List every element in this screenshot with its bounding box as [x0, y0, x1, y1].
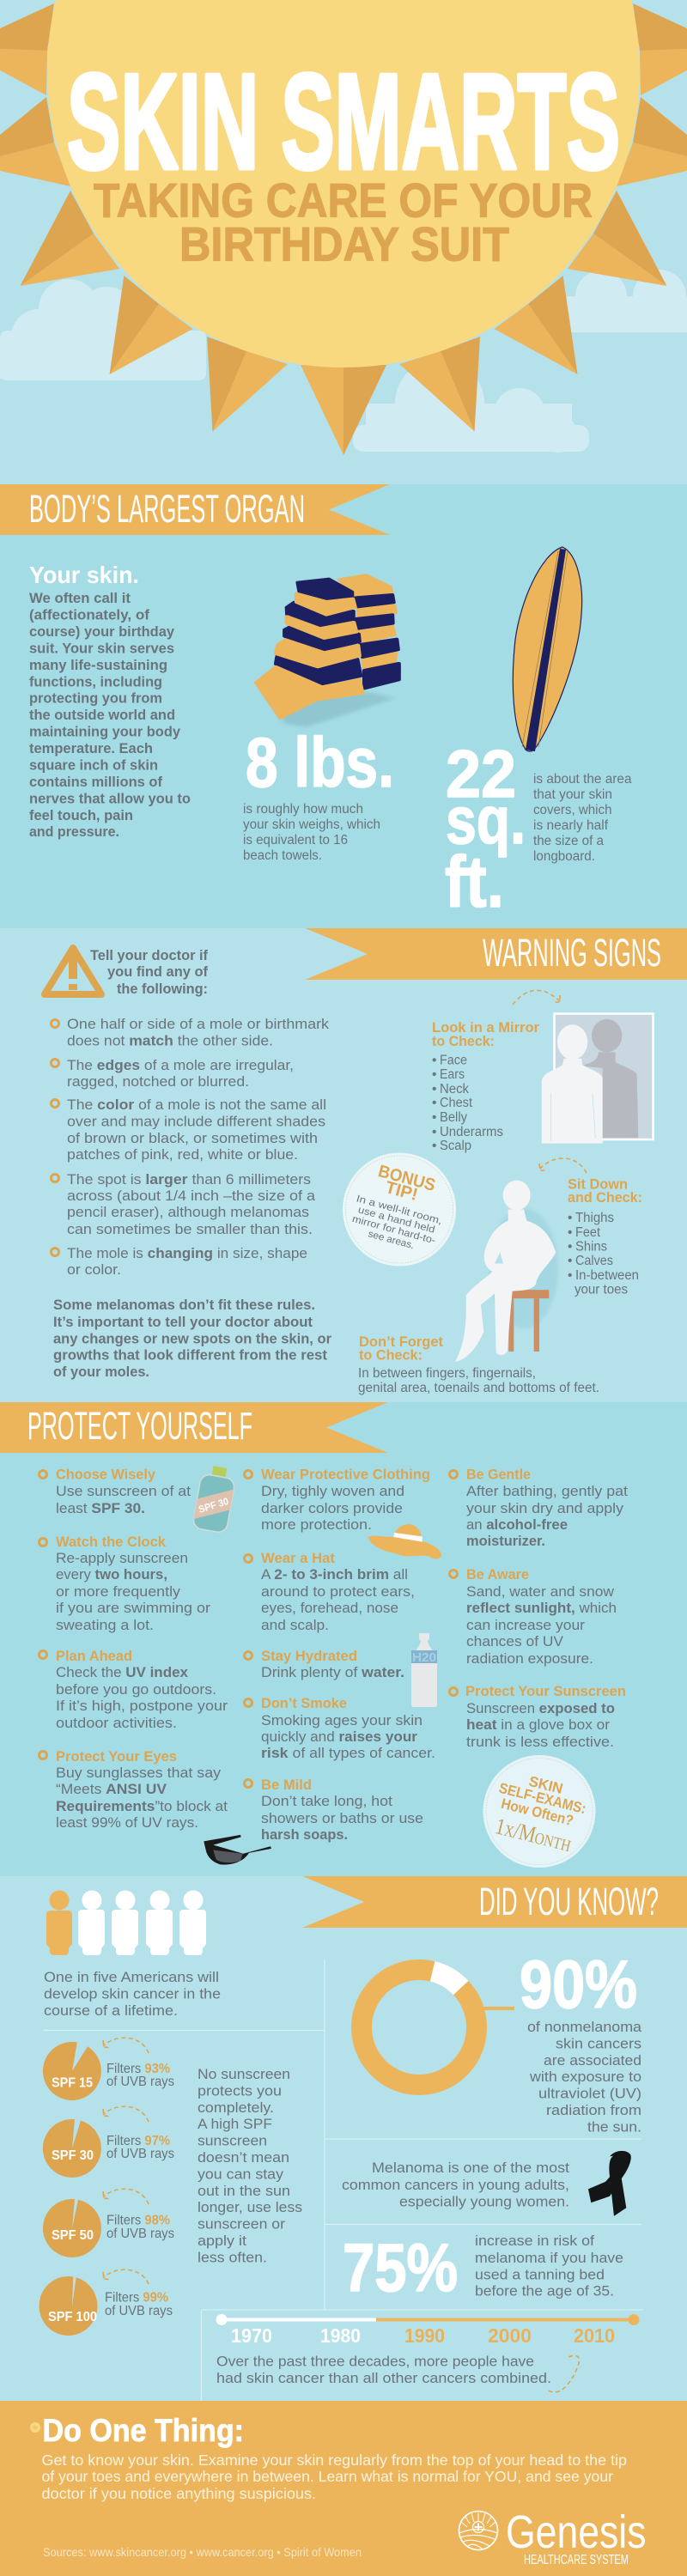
- chart: 90% donut: [362, 1970, 514, 2085]
- list: warning signs: patches of pink, red, white or blue.: [67, 1147, 298, 1163]
- stat: 75%: used a tanning bed: [475, 2267, 605, 2282]
- chart: timeline: 1990: [404, 2324, 445, 2347]
- chart: spf 15: of UVB rays: [106, 2075, 174, 2089]
- column: tips 2: eyes, forehead, nose: [261, 1601, 398, 1616]
- icon: stacked towels: [256, 575, 398, 727]
- list: mirror checks: Chest: [440, 1096, 473, 1110]
- column: tips 3: After bathing, gently pat: [466, 1484, 628, 1499]
- column: tips 3: heat in a glove box or: [466, 1717, 611, 1733]
- panel: warning signs: [0, 928, 687, 1402]
- list: sitting checks: •: [568, 1254, 572, 1268]
- column: tips 1: Watch the Clock: [56, 1534, 167, 1550]
- icon: sun hat: [368, 1524, 441, 1559]
- column: tips 1: sweating a lot.: [56, 1618, 154, 1633]
- stat: 8 lbs: [243, 724, 394, 863]
- column: tips 1: before you go outdoors.: [56, 1682, 216, 1698]
- column: tips 3: an alcohol-free: [466, 1517, 568, 1533]
- column: tips 2: Smoking ages your skin: [261, 1713, 423, 1728]
- chart: spf 30: Filters 97%: [106, 2134, 170, 2148]
- heading: tell your doctor: [90, 948, 208, 997]
- callout: skin self-exams: SELF-EXAMS:: [497, 1780, 588, 1817]
- stat: 90%: 90%: [520, 1946, 637, 2022]
- chart: spf 50: of UVB rays: [106, 2227, 174, 2241]
- heading: sit down: [568, 1176, 642, 1206]
- stat: 90%: the sun.: [587, 2119, 641, 2135]
- column: tips 1: if you are swimming or: [56, 1601, 211, 1616]
- text: your skin paragraph: many life-sustaining: [29, 658, 167, 673]
- callout: bonus tip: TIP!: [383, 1178, 420, 1205]
- text: no sunscreen: completely.: [198, 2100, 274, 2116]
- column: tips 2: Be Mild: [261, 1777, 312, 1793]
- list: warning signs: One half or side of a mole or birthmark: [67, 1017, 330, 1032]
- stat: 22 sq. ft.: [445, 736, 632, 922]
- list: mirror checks: •: [432, 1139, 436, 1153]
- column: tips 2: Don’t Smoke: [261, 1695, 347, 1711]
- list: mirror checks: Ears: [440, 1067, 465, 1082]
- list: mirror checks: •: [432, 1125, 436, 1139]
- list: warning signs: The color of a mole is not the same all: [67, 1097, 326, 1113]
- block: don't forget to check: to Check:: [359, 1346, 423, 1364]
- text: your skin paragraph: and pressure.: [29, 824, 119, 840]
- text: past three decades: Over the past three decades, more people have: [216, 2354, 534, 2370]
- text: do one thing paragraph: Get to know your skin. Examine your skin regularly from the top of your head to the tip: [41, 2451, 627, 2469]
- text: some melanomas: of your moles.: [53, 1364, 149, 1380]
- text: one in five: One in five Americans will: [44, 1970, 219, 1985]
- text: your skin paragraph: protecting you from: [29, 691, 162, 707]
- icon: black ribbon: [588, 2151, 631, 2216]
- text: your skin paragraph: the outside world and: [29, 708, 175, 723]
- heading: look in a mirror: Look in a Mirror: [432, 1019, 539, 1036]
- column: tips 1: [40, 1467, 228, 1831]
- logo: genesis healthcare system: Genesis: [506, 2506, 646, 2558]
- column: tips 3: [450, 1467, 628, 1750]
- callout: skin self-exams: 1x/Month: [493, 1813, 575, 1856]
- chart: spf 15: [43, 2038, 174, 2100]
- callout: skin self-exams: How Often?: [500, 1795, 575, 1829]
- text: your skin paragraph: functions, including: [29, 674, 162, 690]
- column: tips 1: outdoor activities.: [56, 1716, 177, 1731]
- stat: 8 lbs: is roughly how much: [243, 802, 363, 817]
- text: no sunscreen: you can stay: [198, 2166, 284, 2182]
- column: tips 3: radiation exposure.: [466, 1651, 593, 1667]
- column: tips 3: moisturizer.: [466, 1534, 545, 1549]
- banner: body's largest organ: [0, 484, 390, 535]
- column: tips 1: Use sunscreen of at: [56, 1484, 191, 1499]
- block: don't forget to check: [358, 1334, 599, 1395]
- illustration: sitting person on stool: [455, 1181, 558, 1362]
- text: past three decades: had skin cancer than all other cancers combined.: [216, 2371, 551, 2386]
- arrow: dashed curve: [547, 2355, 579, 2392]
- text: some melanomas: growths that look different from the rest: [53, 1348, 327, 1364]
- panel: body's largest organ: [0, 484, 687, 928]
- column: tips 1: least SPF 30.: [56, 1501, 145, 1516]
- heading: tell your doctor: Tell your doctor if: [90, 948, 208, 963]
- stat: 22 sq. ft.: that your skin: [533, 787, 612, 802]
- stat: 90%: are associated: [544, 2053, 641, 2069]
- text: your skin paragraph: temperature. Each: [29, 741, 153, 756]
- stat: 8 lbs: 8 lbs.: [246, 724, 394, 802]
- text: some melanomas: It’s important to tell your doctor about: [53, 1315, 313, 1330]
- list: mirror checks: •: [432, 1053, 436, 1067]
- arrow: mirror dashed arc: [513, 990, 560, 1005]
- stat: 22 sq. ft.: longboard.: [533, 849, 595, 864]
- icon: sunscreen bottle: [192, 1464, 237, 1534]
- list: warning signs: The edges of a mole are irregular,: [67, 1058, 294, 1073]
- column: tips 3: Sunscreen exposed to: [466, 1701, 615, 1716]
- list: warning signs: of brown or black, or sometimes with: [67, 1131, 318, 1146]
- heading: look in a mirror: [432, 1019, 539, 1049]
- text: your skin paragraph: suit. Your skin serves: [29, 641, 174, 656]
- icon: surfboard: [513, 547, 582, 751]
- text: do one thing paragraph: of your toes and everywhere in between. Learn what is normal for YOU, and see your: [41, 2468, 613, 2485]
- block: don't forget to check: genital area, toenails and bottoms of feet.: [358, 1381, 599, 1395]
- chart: timeline: 2000: [488, 2324, 532, 2347]
- list: warning signs: The mole is changing in size, shape: [67, 1246, 307, 1261]
- stat: 90%: with exposure to: [529, 2069, 641, 2085]
- callout: skin self-exams: [483, 1755, 596, 1868]
- callout: bonus tip: mirror for hard-to-: [351, 1214, 437, 1246]
- column: tips 2: harsh soaps.: [261, 1827, 348, 1843]
- column: tips 1: Buy sunglasses that say: [56, 1765, 222, 1781]
- column: tips 1: least 99% of UV rays.: [56, 1815, 198, 1831]
- icon: sunglasses: [204, 1835, 271, 1865]
- icon: bottom cloud: [353, 359, 589, 453]
- stat: 22 sq. ft.: is about the area: [533, 772, 632, 787]
- icon: five people: [46, 1891, 206, 1955]
- icon: right cloud: [567, 270, 687, 332]
- banner: did you know: [302, 1876, 687, 1928]
- column: tips 3: can increase your: [466, 1618, 586, 1633]
- stat: 8 lbs: is equivalent to 16: [243, 833, 348, 848]
- heading: look in a mirror: to Check:: [432, 1033, 495, 1049]
- text: one in five: [44, 1970, 221, 2019]
- stat: 75%: before the age of 35.: [475, 2284, 614, 2300]
- text: no sunscreen: [198, 2067, 302, 2265]
- stat: 22 sq. ft.: sq.: [446, 782, 526, 858]
- stat: 75%: 75%: [343, 2229, 458, 2306]
- text: past three decades: [216, 2354, 551, 2386]
- column: tips 2: showers or baths or use: [261, 1811, 423, 1826]
- banner: body's largest organ: BODY’S LARGEST ORGAN: [29, 487, 305, 531]
- list: warning signs: or color.: [67, 1262, 121, 1278]
- subtitle: TAKING CARE OF YOUR: [94, 173, 593, 227]
- callout: bonus tip: [343, 1152, 456, 1266]
- icon: water bottle: [411, 1633, 437, 1707]
- text: some melanomas: [53, 1297, 332, 1380]
- stat: 90%: radiation from: [546, 2103, 641, 2118]
- column: tips 1: Protect Your Eyes: [56, 1748, 177, 1765]
- column: tips 2: risk of all types of cancer.: [261, 1746, 435, 1761]
- list: sitting checks: •: [568, 1225, 572, 1240]
- icon: sun rays: [0, 3, 687, 455]
- list: mirror checks: Neck: [440, 1082, 469, 1097]
- chart: spf 50: [43, 2189, 174, 2257]
- list: mirror checks: •: [432, 1110, 436, 1125]
- column: tips 1: “Meets ANSI UV: [56, 1782, 167, 1797]
- column: tips 2: Wear Protective Clothing: [261, 1467, 430, 1483]
- text: your skin paragraph: contains millions of: [29, 775, 162, 790]
- column: tips 3: Protect Your Sunscreen: [465, 1683, 626, 1699]
- list: warning signs: pencil eraser), although melanomas: [67, 1205, 309, 1220]
- text: no sunscreen: sunscreen: [198, 2134, 267, 2149]
- stat: 75%: increase in risk of: [475, 2233, 594, 2249]
- list: warning signs: does not match the other side.: [67, 1034, 273, 1049]
- list: warning signs: ragged, notched or blurred.: [67, 1074, 249, 1090]
- chart: spf 50: Filters 98%: [106, 2214, 170, 2227]
- heading: do one thing: Do One Thing:: [43, 2413, 244, 2448]
- list: sitting checks: •: [568, 1268, 572, 1283]
- chart: timeline: 2010: [574, 2324, 615, 2347]
- text: melanoma: [342, 2160, 569, 2210]
- column: tips 1: or more frequently: [56, 1584, 181, 1600]
- heading: tell your doctor: you find any of: [107, 964, 208, 980]
- text: no sunscreen: out in the sun: [198, 2184, 290, 2199]
- text: your skin paragraph: course) your birthday: [29, 624, 175, 640]
- icon: sun disc: [47, 0, 640, 368]
- stat: 22 sq. ft.: ft.: [445, 841, 504, 922]
- column: tips 3: Be Gentle: [466, 1467, 531, 1483]
- text: some melanomas: Some melanomas don’t fit these rules.: [53, 1297, 315, 1313]
- heading: your skin: Your skin.: [29, 562, 139, 588]
- chart: timeline: 1970: [231, 2324, 272, 2347]
- text: some melanomas: any changes or new spots on the skin, or: [53, 1331, 332, 1346]
- chart: spf 50: SPF 50: [52, 2228, 94, 2243]
- column: tips 3: your skin dry and apply: [466, 1501, 624, 1516]
- stat: 22 sq. ft.: covers, which: [533, 803, 611, 817]
- column: tips 1: Check the UV index: [56, 1665, 189, 1680]
- column: tips 2: Wear a Hat: [261, 1550, 335, 1566]
- subtitle: [94, 173, 593, 271]
- panel: do one thing footer: [0, 2401, 687, 2576]
- text: do one thing paragraph: [41, 2451, 627, 2502]
- text: one in five: course of a lifetime.: [44, 2003, 178, 2019]
- list: mirror checks: Scalp: [440, 1139, 471, 1153]
- stat: 8 lbs: beach towels.: [243, 848, 322, 863]
- column: tips 2: quickly and raises your: [261, 1729, 418, 1745]
- list: sitting checks: In-between: [575, 1268, 639, 1283]
- column: tips 2: Stay Hydrated: [261, 1648, 357, 1664]
- column: tips 3: trunk is less effective.: [466, 1735, 614, 1750]
- chart: timeline: 1980: [320, 2324, 361, 2347]
- chart: spf 100: [39, 2269, 173, 2336]
- chart: spf 30: of UVB rays: [106, 2147, 174, 2161]
- callout: skin self-exams: SKIN: [527, 1773, 564, 1797]
- stat: 22 sq. ft.: 22: [446, 736, 516, 811]
- list: sitting checks: [568, 1211, 639, 1297]
- column: tips 3: reflect sunlight, which: [466, 1601, 617, 1616]
- column: tips 2: and scalp.: [261, 1618, 329, 1633]
- column: tips 2: A 2- to 3-inch brim all: [261, 1567, 408, 1583]
- text: one in five: develop skin cancer in the: [44, 1987, 221, 2002]
- icon: sunscreen bottle: SPF 30: [198, 1497, 230, 1516]
- list: warning signs: [52, 1017, 330, 1278]
- heading: tell your doctor: the following:: [117, 981, 208, 997]
- list: mirror checks: •: [432, 1096, 436, 1110]
- column: tips 2: Dry, tighly woven and: [261, 1484, 404, 1499]
- list: sitting checks: Calves: [575, 1254, 613, 1268]
- text: your skin paragraph: feel touch, pain: [29, 808, 133, 823]
- column: tips 3: Be Aware: [466, 1566, 529, 1583]
- list: sitting checks: •: [568, 1240, 572, 1255]
- banner: warning signs: [305, 928, 687, 980]
- chart: spf 30: SPF 30: [52, 2148, 94, 2163]
- text: melanoma: especially young women.: [399, 2195, 569, 2210]
- stat: 22 sq. ft.: the size of a: [533, 834, 604, 848]
- text: no sunscreen: sunscreen or: [198, 2217, 286, 2233]
- text: your skin paragraph: maintaining your body: [29, 725, 181, 740]
- list: sitting checks: your toes: [575, 1283, 628, 1297]
- column: tips 1: Requirements ”to block at: [56, 1799, 228, 1814]
- callout: bonus tip: use a hand held: [357, 1205, 436, 1236]
- stat: 75%: [343, 2229, 623, 2306]
- list: mirror checks: [432, 1053, 503, 1153]
- column: tips 2: Don’t take long, hot: [261, 1794, 392, 1809]
- list: mirror checks: Belly: [440, 1110, 467, 1125]
- chart: timeline: [216, 2314, 639, 2347]
- list: mirror checks: Face: [440, 1053, 467, 1067]
- chart: spf 30: [43, 2106, 174, 2178]
- chart: spf 100: Filters 99%: [105, 2291, 168, 2306]
- text: your skin paragraph: square inch of skin: [29, 757, 158, 773]
- list: warning signs: across (about 1/4 inch –the size of a: [67, 1188, 316, 1204]
- column: tips 2: Drink plenty of water.: [261, 1665, 404, 1680]
- illustration: person in mirror: [542, 1013, 653, 1144]
- panel: header sky: [0, 0, 687, 484]
- panel: protect yourself: [0, 1402, 687, 1876]
- column: tips 2: darker colors provide: [261, 1501, 403, 1516]
- callout: bonus tip: In a well-lit room,: [355, 1194, 443, 1227]
- stat: 22 sq. ft.: is nearly half: [533, 818, 609, 833]
- chart: spf 100: SPF 100: [48, 2310, 97, 2324]
- text: no sunscreen: longer, use less: [198, 2200, 302, 2215]
- column: tips 2: around to protect ears,: [261, 1584, 415, 1600]
- column: tips 1: If it’s high, postpone your: [56, 1698, 228, 1714]
- list: sitting checks: Thighs: [575, 1211, 614, 1225]
- text: no sunscreen: apply it: [198, 2233, 246, 2249]
- column: tips 1: Plan Ahead: [56, 1648, 132, 1664]
- subtitle: BIRTHDAY SUIT: [179, 216, 509, 271]
- column: tips 2: [244, 1467, 435, 1843]
- text: melanoma: common cancers in young adults,: [342, 2178, 569, 2193]
- text: no sunscreen: less often.: [198, 2250, 267, 2265]
- heading: sit down: Sit Down: [568, 1176, 628, 1192]
- logo: genesis healthcare system: [459, 2506, 646, 2567]
- text: melanoma: Melanoma is one of the most: [372, 2160, 569, 2176]
- panel: did you know: [0, 1876, 687, 2401]
- stat: 90%: skin cancers: [556, 2036, 641, 2051]
- stat: 90%: ultraviolet (UV): [538, 2087, 641, 2102]
- heading: sit down: and Check:: [568, 1189, 642, 1206]
- chart: spf 15: SPF 15: [52, 2076, 93, 2091]
- block: don't forget to check: Don’t Forget: [359, 1334, 443, 1350]
- icon: warning triangle: [45, 948, 101, 994]
- list: warning signs: can sometimes be smaller than this.: [67, 1222, 313, 1237]
- list: mirror checks: •: [432, 1082, 436, 1097]
- list: sitting checks: Shins: [575, 1240, 607, 1255]
- list: mirror checks: •: [432, 1067, 436, 1082]
- column: tips 1: every two hours,: [56, 1567, 167, 1583]
- text: no sunscreen: protects you: [198, 2083, 282, 2099]
- text: sources: Sources: www.skincancer.org • www.cancer.org • Spirit of Women: [43, 2545, 362, 2559]
- icon: left cloud: [0, 279, 206, 380]
- logo: genesis healthcare system: HEALTHCARE SYSTEM: [524, 2553, 629, 2567]
- text: your skin paragraph: nerves that allow you to: [29, 791, 191, 806]
- stat: 75%: melanoma if you have: [475, 2251, 623, 2266]
- text: no sunscreen: No sunscreen: [198, 2067, 290, 2082]
- text: your skin paragraph: [29, 591, 191, 840]
- block: don't forget to check: In between fingers, fingernails,: [358, 1366, 536, 1381]
- list: sitting checks: Feet: [575, 1225, 601, 1240]
- list: warning signs: The spot is larger than 6 millimeters: [67, 1172, 311, 1188]
- column: tips 1: Choose Wisely: [56, 1467, 156, 1483]
- callout: bonus tip: BONUS: [376, 1162, 437, 1195]
- column: tips 3: Sand, water and snow: [466, 1584, 614, 1600]
- text: your skin paragraph: (affectionately, of: [29, 608, 150, 623]
- banner: protect yourself: PROTECT YOURSELF: [27, 1404, 252, 1448]
- arrow: sitting dashed arc: [539, 1158, 587, 1173]
- text: no sunscreen: A high SPF: [198, 2117, 272, 2132]
- column: tips 1: Re-apply sunscreen: [56, 1551, 188, 1566]
- stat: 8 lbs: your skin weighs, which: [243, 817, 380, 832]
- icon: water bottle: H20: [412, 1650, 436, 1665]
- icon: small dot: [30, 2422, 40, 2433]
- stat: 90%: [520, 1946, 642, 2135]
- list: sitting checks: •: [568, 1211, 572, 1225]
- column: tips 3: chances of UV: [466, 1634, 563, 1649]
- chart: spf 100: of UVB rays: [105, 2304, 173, 2318]
- list: warning signs: over and may include different shades: [67, 1115, 325, 1130]
- stat: 90%: of nonmelanoma: [527, 2020, 642, 2035]
- list: mirror checks: Underarms: [440, 1125, 503, 1139]
- chart: spf 15: Filters 93%: [106, 2062, 170, 2076]
- text: your skin paragraph: We often call it: [29, 591, 131, 606]
- text: do one thing paragraph: doctor if you notice anything suspicious.: [41, 2485, 316, 2502]
- text: no sunscreen: doesn’t mean: [198, 2150, 289, 2166]
- column: tips 2: more protection.: [261, 1517, 372, 1533]
- callout: bonus tip: see areas.: [367, 1229, 416, 1251]
